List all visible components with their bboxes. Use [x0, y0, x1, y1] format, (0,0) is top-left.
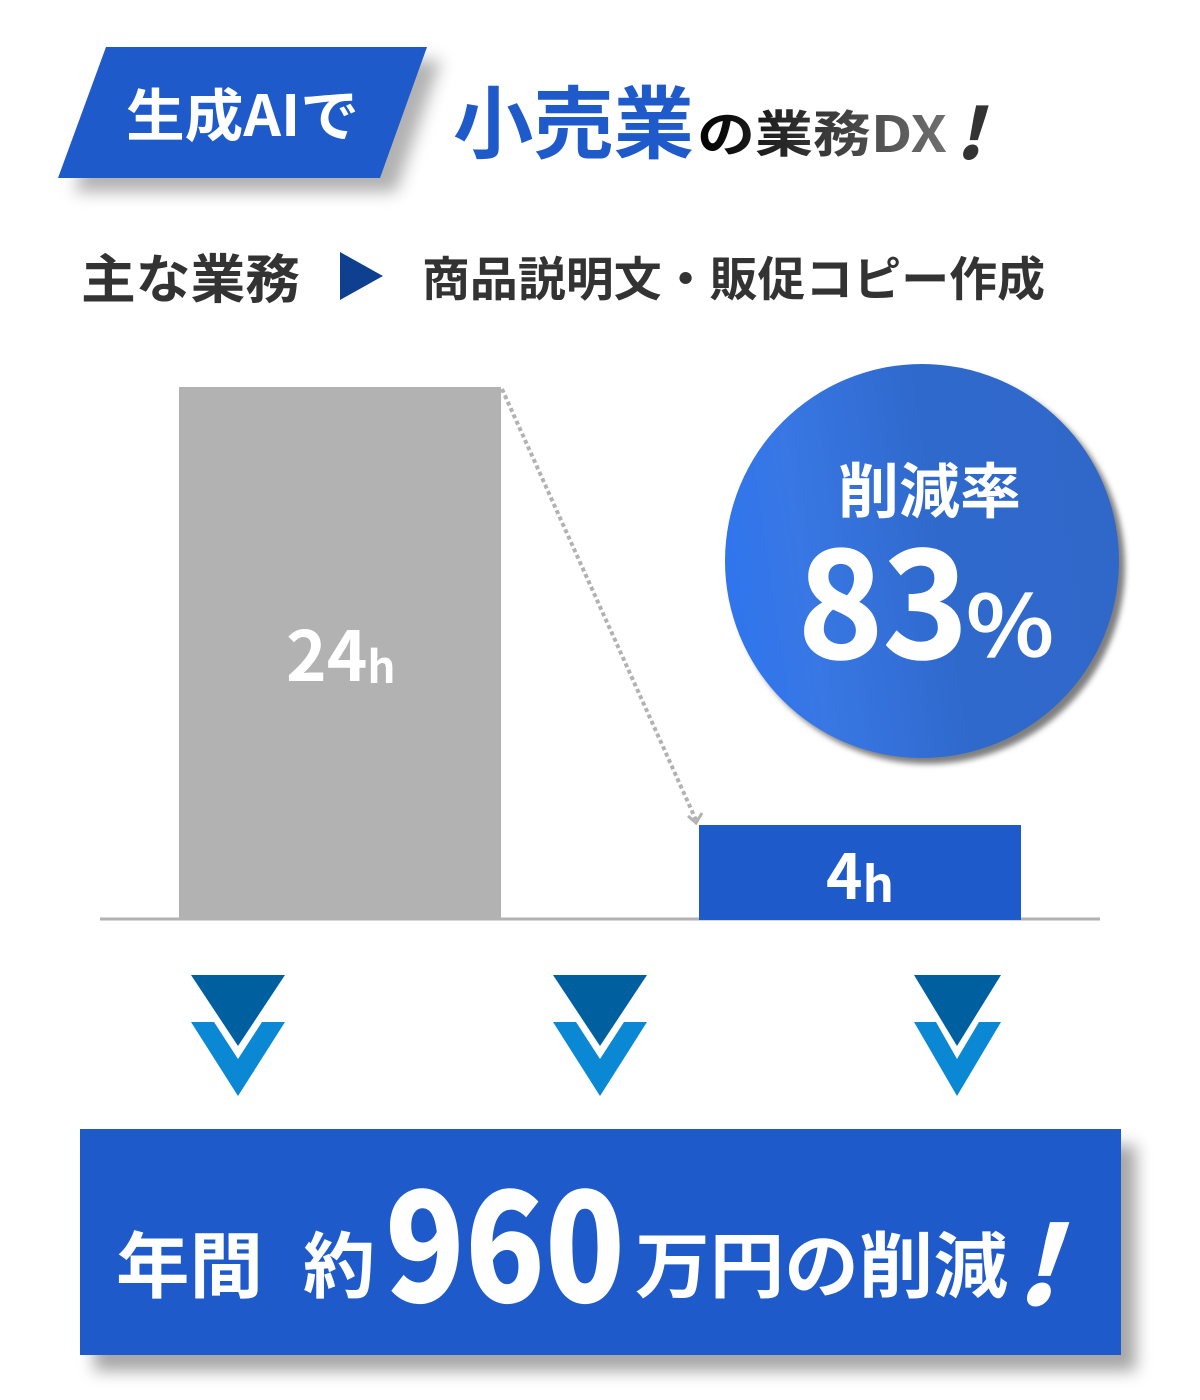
bar: before 24h: [179, 387, 501, 920]
main task label: 商品説明文・販促コピー作成: [422, 241, 1045, 310]
bar chart: [100, 387, 1100, 920]
bar: after 4h: h: [863, 846, 894, 917]
title: 小売業: [453, 60, 694, 175]
result banner: 960: [385, 1129, 625, 1346]
reduction rate circle: 削減率: [838, 444, 1021, 531]
result banner: !: [1006, 1180, 1093, 1336]
down arrows: [191, 975, 1001, 1096]
result banner: [80, 1129, 1136, 1371]
result banner: 万円の削減: [635, 1208, 1008, 1313]
title: [453, 60, 1003, 180]
bar: before 24h: 24: [286, 601, 367, 701]
title: !: [950, 79, 1003, 180]
result banner: 年間: [116, 1208, 263, 1313]
reduction rate circle: [725, 364, 1125, 764]
header badge: 生成AIで: [126, 71, 359, 153]
bar: after 4h: [699, 825, 1021, 920]
reduction rate circle: 83: [798, 490, 968, 701]
arrow: left: [191, 975, 285, 1096]
title: の業務DX: [697, 95, 947, 167]
arrow: dotted reduction: [502, 389, 702, 823]
result banner: 約: [303, 1208, 375, 1313]
main task label: 主な業務: [81, 238, 300, 314]
bar: after 4h: 4: [826, 827, 863, 917]
main task label: [81, 238, 1045, 314]
arrow: right: [914, 975, 1001, 1096]
header badge: [58, 47, 441, 192]
arrow: center: [553, 975, 647, 1096]
bar: before 24h: h: [367, 632, 396, 696]
reduction rate circle: %: [966, 560, 1054, 681]
